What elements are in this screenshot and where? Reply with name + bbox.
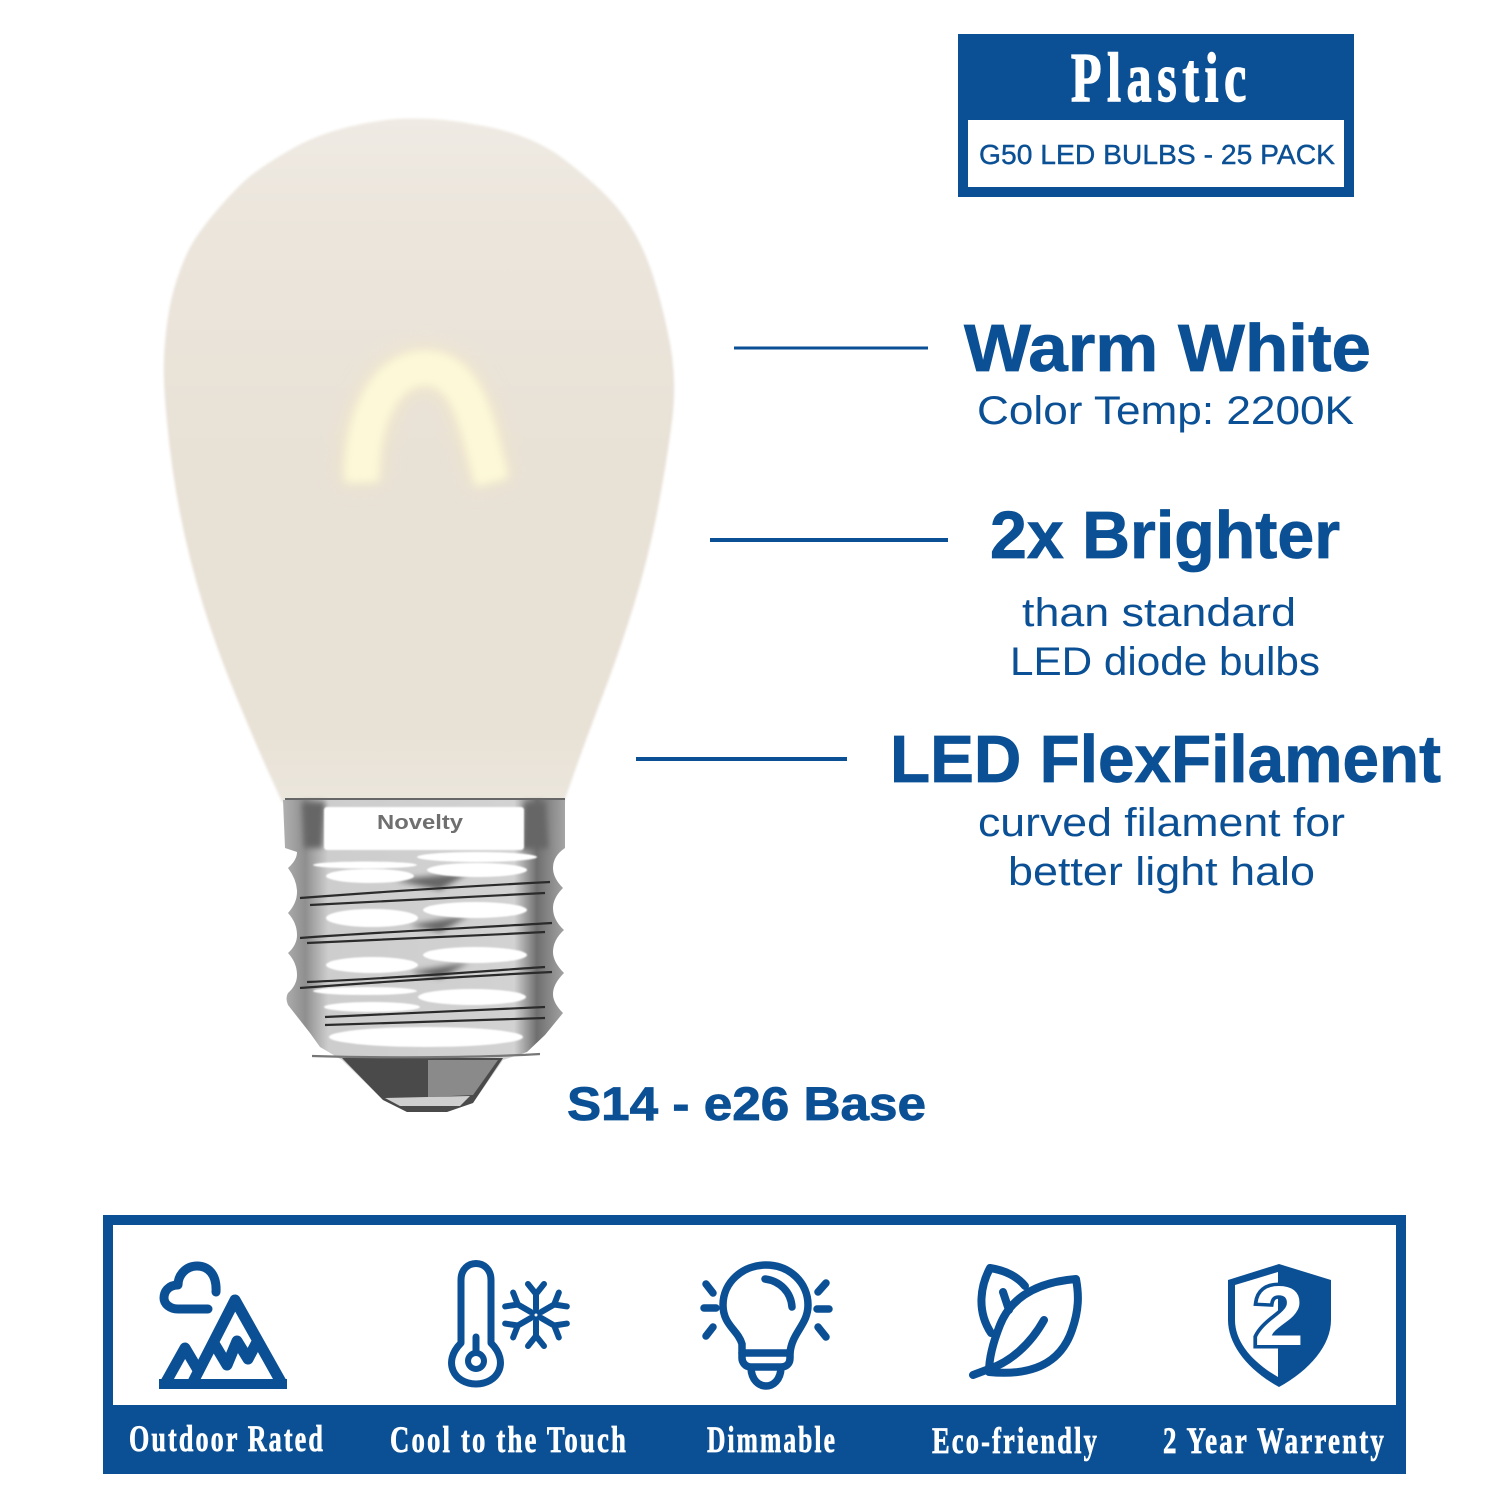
product badge [958, 34, 1354, 197]
embossed Novelty mark: Novelty [377, 812, 464, 834]
icon: light bulb [704, 1265, 829, 1386]
heading: Warm White [964, 311, 1371, 386]
icon: thermometer and snowflake [452, 1264, 567, 1384]
badge title: Plastic [1071, 40, 1252, 117]
screw base [283, 799, 565, 1112]
filament description: curved filament for [978, 801, 1345, 845]
curved filament glow [362, 368, 492, 484]
comparison text line two: LED diode bulbs [1010, 640, 1320, 684]
heading: LED FlexFilament [890, 722, 1441, 797]
label: warranty: 2 Year Warrenty [1163, 1421, 1386, 1462]
icon: mountain and cloud [159, 1266, 287, 1389]
heading: 2x Brighter [990, 498, 1340, 573]
icon: two year shield [1228, 1264, 1331, 1387]
label: outdoor rated: Outdoor Rated [129, 1419, 325, 1460]
callout: brighter [710, 498, 1340, 684]
features panel [103, 1215, 1406, 1474]
label: eco-friendly: Eco-friendly [932, 1421, 1099, 1462]
light bulb photo [164, 119, 674, 1112]
icon: leaf [973, 1268, 1078, 1375]
base label: S14 - e26 Base [567, 1077, 926, 1130]
callout: flexfilament [636, 722, 1441, 894]
filament description line two: better light halo [1008, 850, 1315, 894]
label: cool to the touch: Cool to the Touch [390, 1420, 628, 1461]
callout: warm white [734, 311, 1371, 433]
shield number: 2 [1254, 1269, 1304, 1363]
metal contact tip [342, 1058, 503, 1112]
comparison text: than standard [1022, 591, 1296, 635]
badge subtitle: G50 LED BULBS - 25 PACK [979, 139, 1335, 170]
bulb glass [164, 119, 674, 802]
label: dimmable: Dimmable [707, 1420, 837, 1461]
color temperature: Color Temp: 2200K [977, 389, 1354, 433]
